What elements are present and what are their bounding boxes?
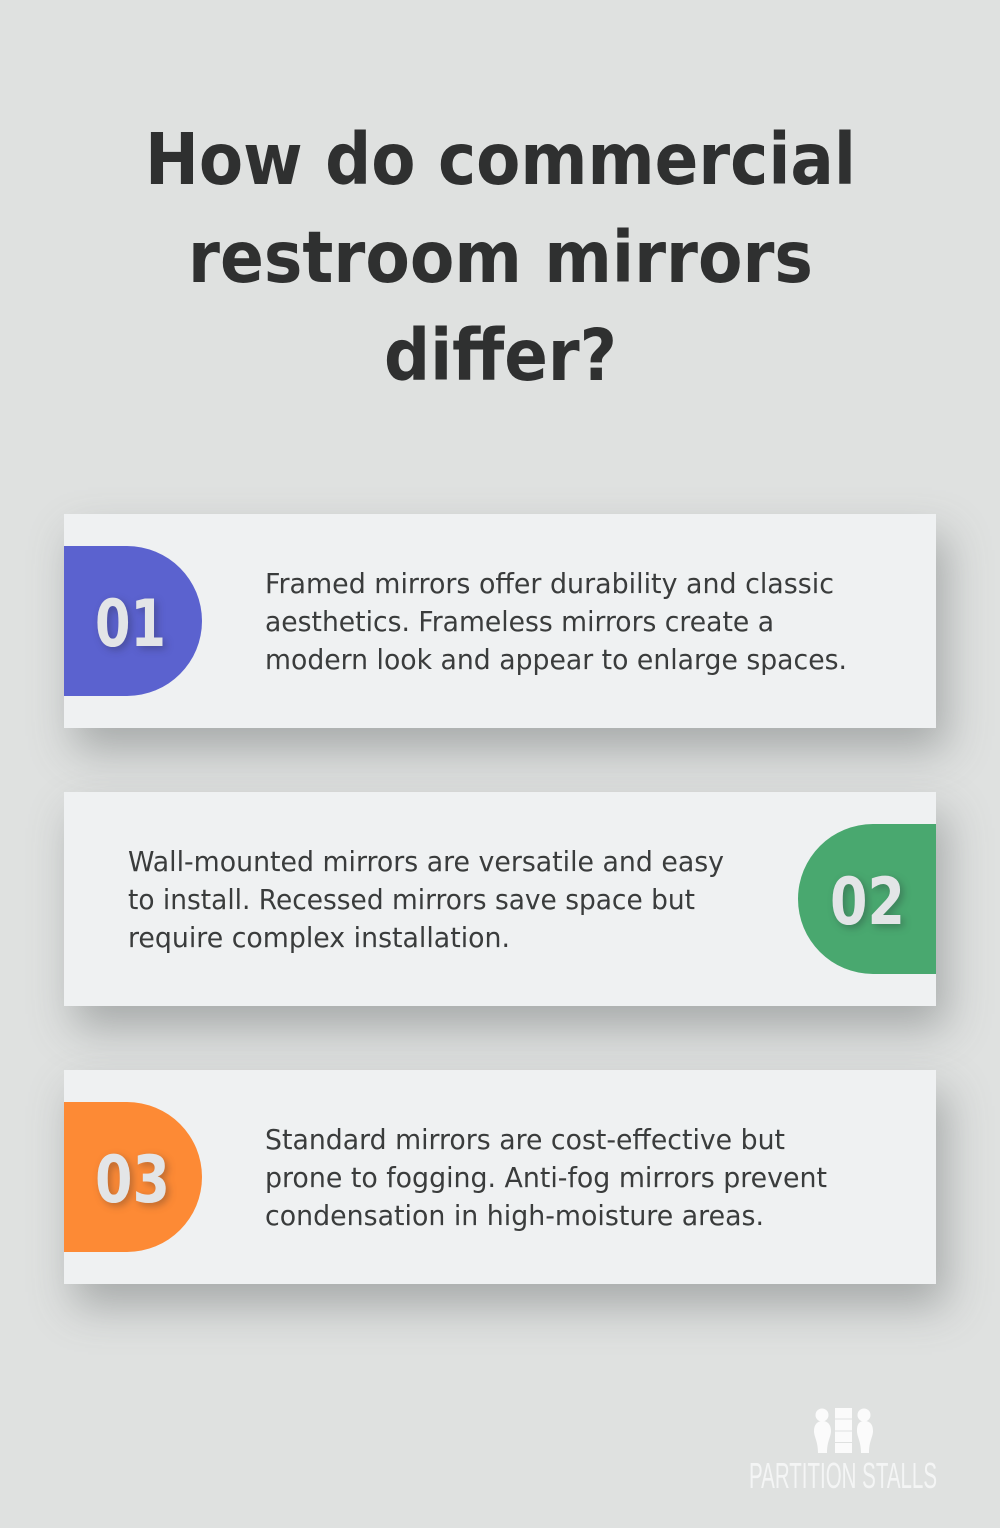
text: step 02 description: require complex installation.	[128, 922, 510, 954]
text: step 03 description: prone to fogging. Anti-fog mirrors prevent	[265, 1162, 827, 1194]
text: step 02 description: Wall-mounted mirrors are versatile and easy	[128, 846, 724, 878]
text: step 01 description: aesthetics. Frameless mirrors create a	[265, 606, 774, 638]
text: step 02 description: to install. Recessed mirrors save space but	[128, 884, 695, 916]
title: differ?	[384, 314, 617, 397]
text: step 02 description	[128, 846, 724, 954]
text: step 03 description: condensation in high-moisture areas.	[265, 1200, 764, 1232]
badge: 01	[64, 546, 202, 696]
badge: 03	[64, 1102, 202, 1252]
panel: step 02 wall-mounted vs recessed	[64, 792, 936, 1006]
badge: 01: 01	[95, 587, 166, 662]
badge: 03: 03	[95, 1143, 170, 1218]
text: step 01 description: Framed mirrors offer durability and classic	[265, 568, 834, 600]
badge: 02	[798, 824, 936, 974]
panel: step 01 framed vs frameless	[64, 514, 936, 728]
title: How do commercial	[145, 118, 856, 201]
text: step 03 description: Standard mirrors are cost-effective but	[265, 1124, 785, 1156]
text: step 03 description	[265, 1124, 827, 1232]
text: step 01 description: modern look and appear to enlarge spaces.	[265, 644, 847, 676]
text: step 01 description	[265, 568, 847, 676]
title	[145, 118, 856, 397]
panel: step 03 standard vs anti-fog	[64, 1070, 936, 1284]
badge: 02: 02	[830, 865, 905, 940]
title: restroom mirrors	[188, 216, 813, 299]
